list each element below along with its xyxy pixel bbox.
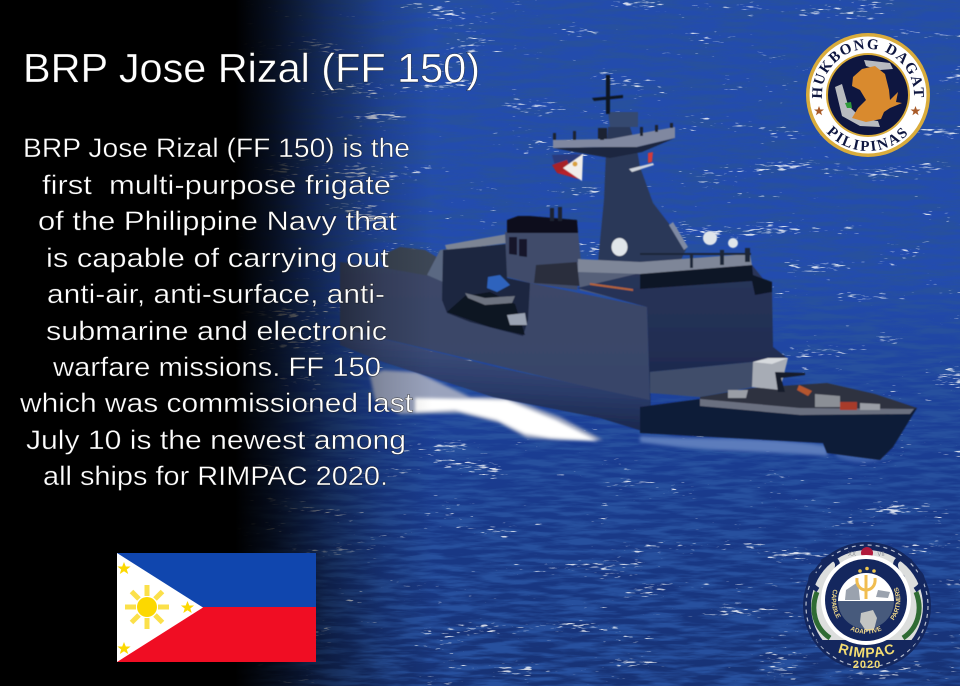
rimpac distant islands (845, 582, 890, 600)
description text: first multi-purpose frigate (42, 170, 391, 200)
ship: mast platform (553, 123, 675, 158)
ship: main hull side (340, 262, 650, 402)
ship: radomes (612, 231, 738, 256)
ship: orange trim (590, 283, 633, 291)
ship: naval gun (752, 358, 788, 390)
ship: RHIB boat (447, 275, 527, 335)
description text: anti-air, anti-surface, anti- (47, 279, 385, 309)
ship: rail posts (640, 248, 751, 268)
ship: bow hull (640, 385, 917, 460)
description text: July 10 is the newest among (26, 425, 406, 455)
ship: ensign flag (552, 154, 583, 181)
wake behind the ship (370, 370, 884, 462)
ship: exhaust stacks (550, 207, 562, 221)
ship: hangar recess (442, 244, 530, 336)
ship: small red flag (648, 152, 653, 163)
description text: which was commissioned last (19, 388, 414, 418)
ship: signal wing (629, 163, 654, 172)
description text: is capable of carrying out (46, 243, 390, 273)
description text: submarine and electronic (46, 316, 387, 346)
ship: mid deck gear (534, 262, 580, 286)
rimpac ring mottoes: PARTNERS (890, 588, 900, 620)
ship: funnel windows (509, 237, 527, 257)
ship: funnel top (507, 216, 578, 233)
description text: BRP Jose Rizal (FF 150) is the (23, 133, 410, 163)
rimpac ring mottoes (832, 588, 900, 634)
ship: breakwater (650, 362, 753, 397)
seal anchor (835, 60, 893, 127)
seal green detail (845, 102, 852, 108)
seal lettering: HUKBONG DAGAT (812, 39, 924, 99)
seal sea lion (852, 66, 902, 122)
ship: upper deck rail (578, 254, 752, 274)
ship: mast pole and yard (592, 75, 623, 114)
ship: mast (598, 127, 687, 262)
rimpac globe (838, 573, 894, 601)
rimpac hibiscus (861, 547, 873, 559)
rimpac year: 2020 (853, 659, 881, 671)
seal stars (814, 106, 920, 115)
ship: davit housing (427, 249, 448, 282)
rimpac crest numerals: XX (848, 552, 856, 558)
ship: gun barrel (775, 372, 805, 392)
rimpac green scrolls (814, 592, 919, 638)
frigate BRP Jose Rizal (340, 75, 917, 460)
ship: lower hull band (340, 328, 652, 434)
ship: window band (640, 265, 772, 295)
ship: quarterdeck rail (445, 234, 507, 251)
ship: deck edge (700, 399, 914, 415)
description text: all ships for RIMPAC 2020. (43, 461, 388, 491)
ship: forward superstructure (577, 265, 787, 434)
rimpac name: RIMPAC (838, 643, 894, 658)
Philippine flag (117, 553, 316, 662)
ship: aft deck clutter (380, 247, 445, 276)
emblem: Hukbong Dagat Pilipinas seal (806, 33, 930, 157)
description text (19, 133, 414, 491)
flag sun (125, 585, 169, 629)
title: BRP Jose Rizal (FF 150) (23, 45, 480, 91)
ship: gun top (753, 358, 788, 364)
rimpac lower banner (816, 640, 918, 665)
flag stars (117, 562, 194, 654)
description text: warfare missions. FF 150 (52, 352, 381, 382)
emblem: Hukbong Dagat Pilipinas seal: PILIPINAS (826, 125, 907, 151)
description text: of the Philippine Navy that (38, 206, 398, 236)
ship: deck patches (728, 385, 880, 410)
ship: radar block (608, 112, 638, 127)
rimpac trident (857, 575, 875, 599)
rimpac inner ring (821, 555, 911, 645)
rimpac crest numerals: VII (877, 552, 885, 558)
rimpac ring mottoes: CAPABLE (832, 590, 841, 618)
rimpac crest numerals (848, 552, 885, 558)
ship: funnel block (505, 232, 581, 290)
rimpac stars (858, 567, 876, 573)
emblem: RIMPAC 2020 (803, 542, 931, 671)
rimpac island (860, 610, 877, 631)
ship: mid block (577, 262, 647, 306)
rimpac ring mottoes: ADAPTIVE (850, 626, 882, 634)
rimpac navy scrolls (811, 558, 922, 590)
ship: foredeck (700, 383, 917, 411)
ship: mast lit edge (669, 222, 688, 250)
